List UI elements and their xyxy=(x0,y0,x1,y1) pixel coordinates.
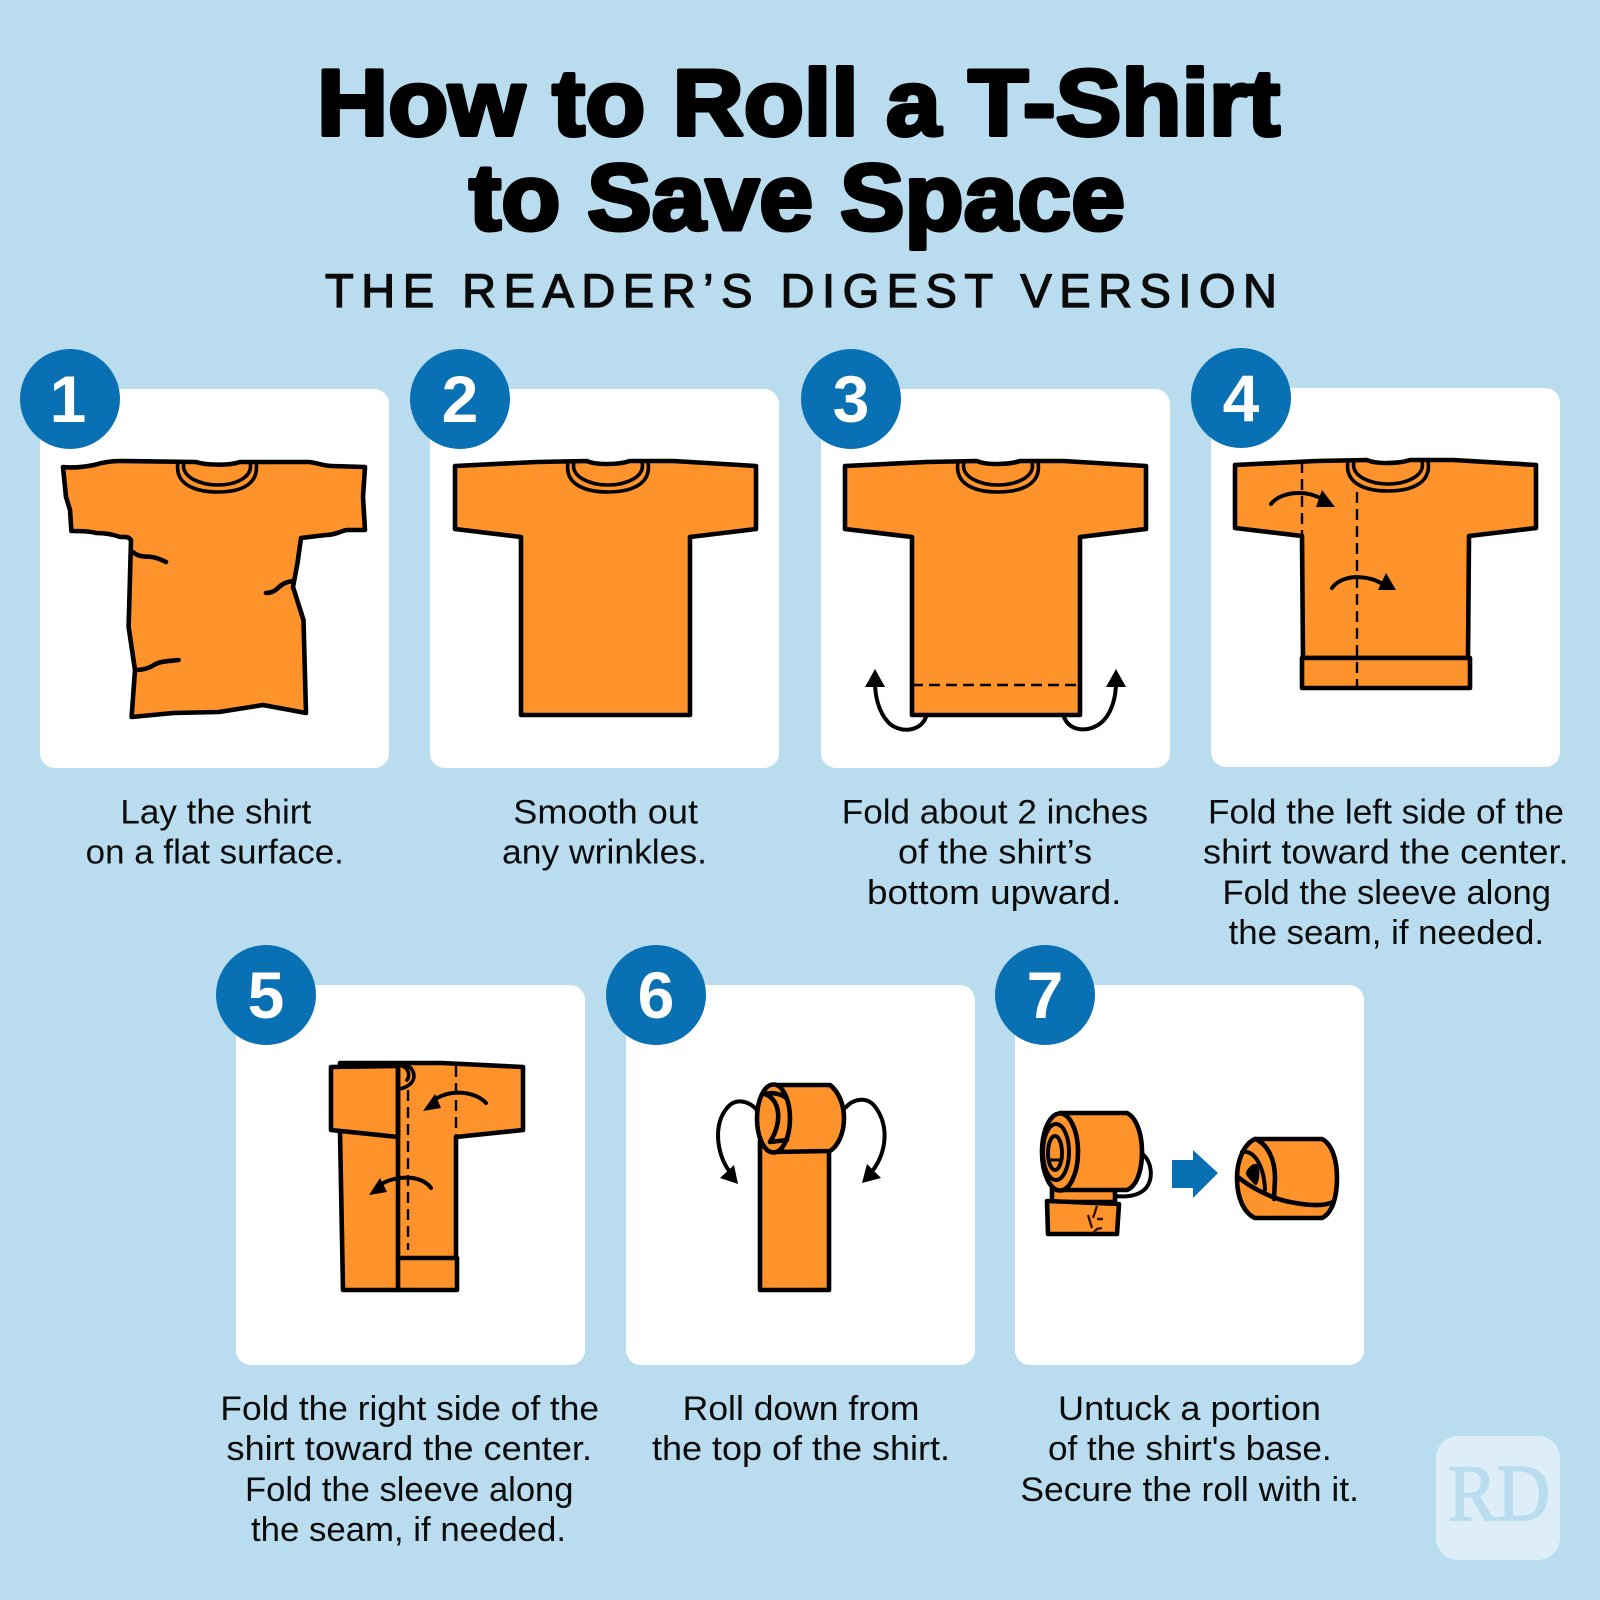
logo: RD watermark xyxy=(1436,1436,1560,1560)
caption 3 xyxy=(842,794,1148,912)
panel: step 3 xyxy=(801,349,1170,912)
arrow: fold up right xyxy=(1064,669,1126,729)
panel: step 6 xyxy=(606,945,975,1468)
arrow: body fold left xyxy=(369,1178,431,1195)
subtitle: THE READER’S DIGEST VERSION xyxy=(325,264,1277,317)
arrow: body fold right xyxy=(1332,573,1396,590)
caption 5: Fold the right side of the xyxy=(220,1390,599,1428)
caption 4: Fold the sleeve along xyxy=(1222,874,1551,912)
caption 2: any wrinkles. xyxy=(502,834,707,872)
icon: shirt folding left side xyxy=(1235,460,1536,688)
arrow: fold up left xyxy=(865,669,926,730)
caption 7: Untuck a portion xyxy=(1058,1390,1321,1428)
caption 4: shirt toward the center. xyxy=(1203,834,1569,872)
caption 5: Fold the sleeve along xyxy=(245,1471,574,1509)
number badge 4 xyxy=(1191,348,1291,448)
icon: wrinkled shirt xyxy=(63,461,365,717)
number badge 5: 5 xyxy=(248,958,284,1032)
caption 4: Fold the left side of the xyxy=(1208,794,1564,832)
caption 3: bottom upward. xyxy=(867,874,1121,912)
caption 1: on a flat surface. xyxy=(86,834,344,872)
number badge 7: 7 xyxy=(1027,958,1063,1032)
panel: step 7 xyxy=(995,945,1364,1509)
caption 2 xyxy=(502,794,707,872)
caption 7: of the shirt's base. xyxy=(1048,1430,1332,1468)
caption 2: Smooth out xyxy=(513,794,699,832)
card 1 xyxy=(40,389,389,768)
caption 6: the top of the shirt. xyxy=(652,1430,950,1468)
caption 3: Fold about 2 inches xyxy=(842,794,1148,832)
caption 6: Roll down from xyxy=(683,1390,919,1428)
title: How to Roll a T-Shirt xyxy=(317,50,1280,155)
panel: step 4 xyxy=(1191,348,1569,952)
caption 3: of the shirt’s xyxy=(898,834,1092,872)
panel: step 1 xyxy=(20,349,389,872)
card 3 xyxy=(821,389,1170,768)
number badge 1: 1 xyxy=(50,362,86,436)
caption 4: the seam, if needed. xyxy=(1229,914,1544,952)
logo: RD watermark: RD xyxy=(1448,1450,1550,1538)
caption 1: Lay the shirt xyxy=(120,794,312,832)
number badge 2: 2 xyxy=(442,362,478,436)
caption 5: the seam, if needed. xyxy=(251,1511,566,1549)
number badge 3: 3 xyxy=(833,362,869,436)
number badge 6 xyxy=(606,945,706,1045)
caption 5: shirt toward the center. xyxy=(226,1430,592,1468)
card 5 xyxy=(236,985,585,1365)
arrow: roll down right xyxy=(845,1100,885,1183)
arrow: blue next step xyxy=(1172,1150,1218,1198)
number badge 3 xyxy=(801,349,901,449)
caption 5 xyxy=(220,1390,599,1549)
number badge 1 xyxy=(20,349,120,449)
card 6 xyxy=(626,985,975,1365)
caption 6 xyxy=(652,1390,950,1468)
icon: smooth shirt xyxy=(455,461,756,715)
panel: step 2 xyxy=(410,349,779,872)
panel: step 5 xyxy=(216,945,599,1549)
number badge 2 xyxy=(410,349,510,449)
icon: roll with untucked base xyxy=(1042,1113,1151,1234)
caption 7: Secure the roll with it. xyxy=(1020,1471,1359,1509)
caption 4 xyxy=(1203,794,1569,952)
caption 7 xyxy=(1020,1390,1359,1509)
card 4 xyxy=(1211,388,1560,767)
card 2 xyxy=(430,389,779,768)
number badge 6: 6 xyxy=(638,958,674,1032)
icon: shirt with bottom fold xyxy=(845,461,1146,715)
icon: shirt rolled from top xyxy=(757,1084,844,1290)
arrow: sleeve fold left xyxy=(423,1093,486,1111)
card 7 xyxy=(1015,985,1364,1365)
icon: shirt folding right side xyxy=(331,1063,523,1290)
arrow: sleeve fold right xyxy=(1271,490,1335,507)
number badge 7 xyxy=(995,945,1095,1045)
number badge 5 xyxy=(216,945,316,1045)
icon: secured roll xyxy=(1237,1139,1337,1218)
arrow: roll down left xyxy=(718,1101,757,1184)
number badge 4: 4 xyxy=(1223,361,1260,435)
caption 1 xyxy=(86,794,344,872)
title: to Save Space xyxy=(469,144,1125,250)
title xyxy=(317,50,1280,250)
